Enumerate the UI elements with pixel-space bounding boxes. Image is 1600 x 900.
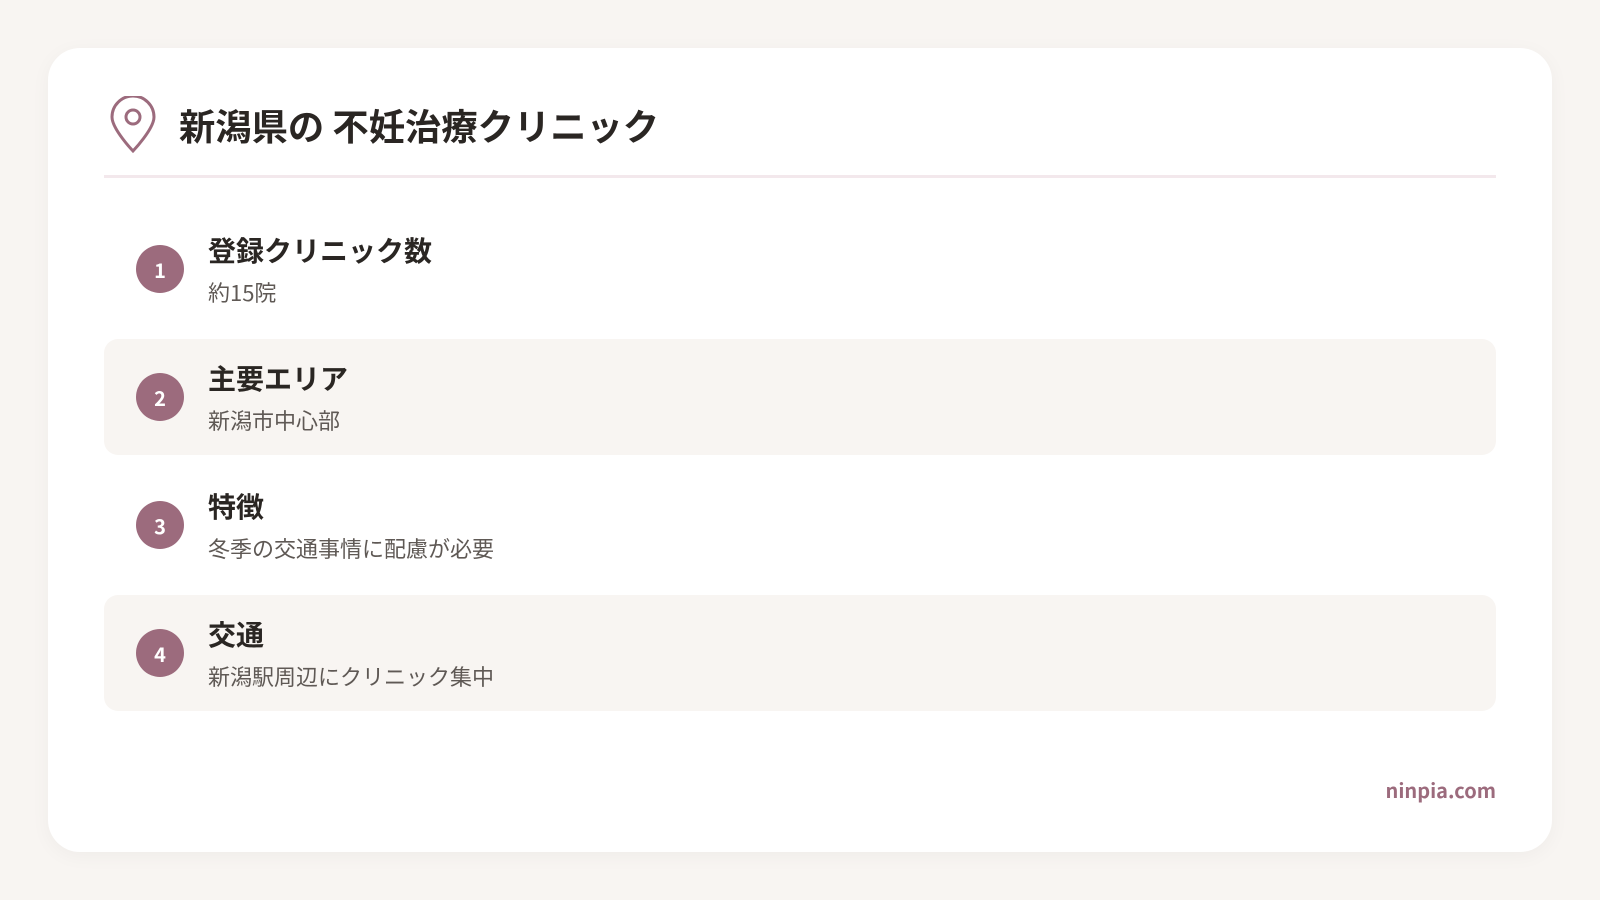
item 4: 4	[154, 638, 166, 668]
item 1: 1	[154, 254, 166, 284]
item 1	[136, 230, 432, 308]
item 1: 約15院	[208, 276, 276, 308]
item 1: 登録クリニック数	[208, 230, 432, 270]
item 3: 特徴	[208, 486, 264, 526]
item 4	[104, 595, 1496, 711]
icon: map pin	[110, 96, 156, 153]
title: 新潟県の 不妊治療クリニック	[179, 99, 659, 151]
item 4: 交通	[208, 614, 264, 654]
item 2: 2	[154, 382, 166, 412]
item 3: 冬季の交通事情に配慮が必要	[208, 532, 494, 564]
item 2: 新潟市中心部	[208, 404, 340, 436]
footer: source: ninpia.com	[1386, 775, 1496, 804]
item 4: 新潟駅周辺にクリニック集中	[208, 660, 494, 692]
item 3	[136, 486, 494, 564]
item 2: 主要エリア	[208, 358, 348, 398]
item 3: 3	[154, 510, 166, 540]
item 2	[104, 339, 1496, 455]
